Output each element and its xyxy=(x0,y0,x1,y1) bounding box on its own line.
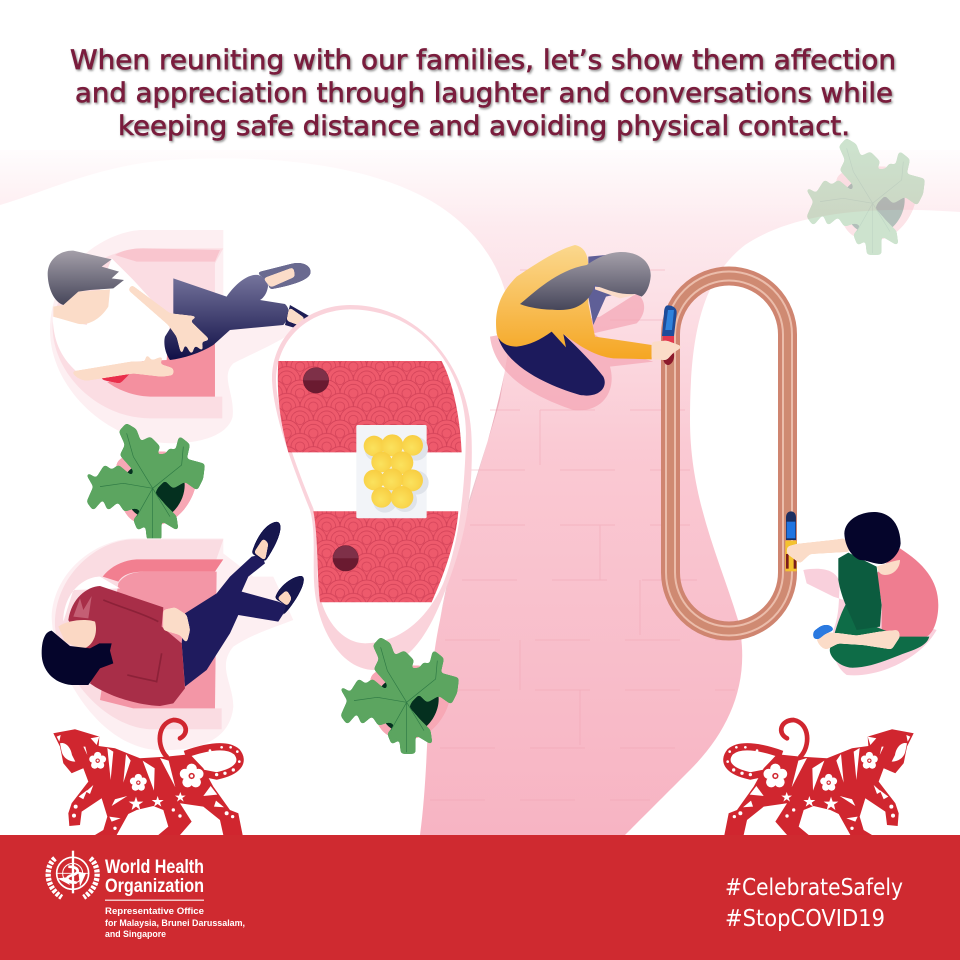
faded plant top right xyxy=(808,140,923,253)
green trousers xyxy=(830,593,929,668)
hair xyxy=(520,252,651,310)
table xyxy=(272,305,472,670)
WHO name: Organization xyxy=(105,875,204,897)
hair xyxy=(48,251,124,305)
pink floor shape xyxy=(0,150,960,835)
sweater xyxy=(68,586,185,706)
pants xyxy=(164,275,289,360)
WHO name: for Malaysia, Brunei Darussalam, xyxy=(105,918,245,929)
face xyxy=(53,289,110,324)
face xyxy=(877,560,900,575)
shirt xyxy=(53,258,170,372)
cup bottom xyxy=(333,545,359,571)
chair halo xyxy=(50,230,297,443)
boy playing xyxy=(787,512,938,675)
shoes xyxy=(257,263,313,330)
chair seat xyxy=(100,572,217,708)
title xyxy=(70,45,896,142)
back leg xyxy=(588,253,623,325)
hashtags xyxy=(725,875,903,932)
arms xyxy=(72,285,210,381)
hair xyxy=(42,631,113,685)
person on left chair, red sweater xyxy=(42,522,304,750)
tiger right xyxy=(724,720,914,835)
chair xyxy=(55,539,223,729)
WHO emblem xyxy=(48,851,97,897)
chair halo xyxy=(52,538,293,750)
woman with yellow top xyxy=(490,245,683,410)
hair xyxy=(844,512,901,564)
arm to train xyxy=(787,538,850,563)
footer band xyxy=(0,835,960,960)
hands xyxy=(163,607,190,643)
plant bottom xyxy=(342,639,457,752)
title: keeping safe distance and avoiding physical contact. xyxy=(118,111,850,142)
WHO name xyxy=(105,856,245,940)
green leg xyxy=(838,553,882,630)
chair xyxy=(53,248,223,418)
hand xyxy=(652,341,683,360)
WHO name: Representative Office xyxy=(105,906,204,917)
pillow xyxy=(85,347,133,383)
plate of food xyxy=(356,425,429,518)
pants xyxy=(498,330,605,396)
face xyxy=(595,287,635,298)
hashtags: #StopCOVID19 xyxy=(725,906,885,932)
shoes xyxy=(252,522,304,622)
table border xyxy=(272,305,472,670)
shadow xyxy=(490,293,653,410)
toy train right xyxy=(785,511,797,571)
patterned band bottom xyxy=(313,511,458,602)
cup top xyxy=(303,367,329,393)
legs xyxy=(182,554,288,687)
title: When reuniting with our families, let’s show them affection xyxy=(70,45,896,76)
WHO name: and Singapore xyxy=(105,929,166,940)
train track xyxy=(670,276,788,631)
tiger left xyxy=(53,720,243,835)
toy xyxy=(813,625,834,639)
hashtags: #CelebrateSafely xyxy=(725,875,903,901)
top xyxy=(496,245,652,359)
chair seat xyxy=(107,343,215,397)
toy train left xyxy=(662,305,677,365)
shadow xyxy=(803,569,937,675)
person on left chair, white shirt xyxy=(48,230,313,443)
title: and appreciation through laughter and conversations while xyxy=(75,78,893,109)
table top xyxy=(276,309,466,643)
plant left xyxy=(88,425,203,538)
pink shirt xyxy=(877,548,938,637)
WHO name: World Health xyxy=(105,856,204,878)
patterned band top xyxy=(278,361,462,452)
arm to toy xyxy=(816,630,900,649)
face xyxy=(58,620,96,649)
